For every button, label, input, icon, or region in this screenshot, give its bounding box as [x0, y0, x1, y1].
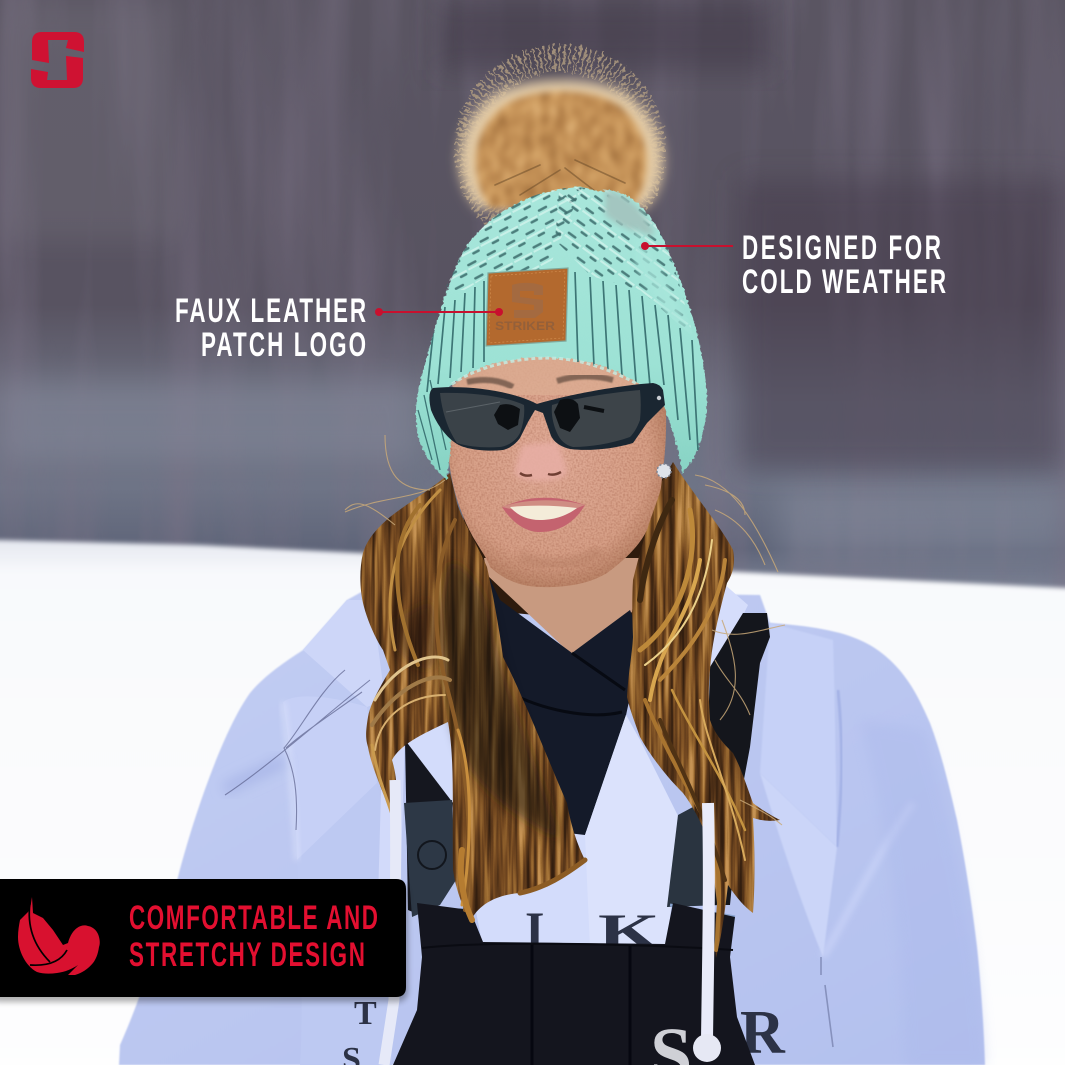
- shadowed hair behind the neck: [455, 470, 668, 625]
- mouth: [502, 498, 585, 532]
- callout text: [742, 229, 946, 301]
- jacket: [119, 590, 985, 1065]
- icon: feather: [18, 897, 100, 975]
- cuff lower edge stitching: [452, 358, 660, 397]
- faux leather patch: STRIKER: [495, 319, 555, 333]
- fur core: [476, 91, 647, 208]
- white hood V-neck: [342, 583, 786, 1065]
- callout text: PATCH LOGO: [201, 326, 366, 364]
- nose: [515, 442, 567, 481]
- black bib overalls: [393, 903, 755, 1065]
- flyaway hairs: [345, 435, 785, 825]
- faux leather patch: [486, 268, 568, 346]
- banner text: COMFORTABLE AND: [129, 899, 378, 937]
- feature banner: [0, 879, 408, 1002]
- left lapel: [303, 600, 385, 707]
- fur spikes: [468, 58, 652, 242]
- hair: [360, 462, 780, 958]
- banner text: [129, 899, 378, 974]
- woman: photographic figure: [119, 58, 985, 1065]
- callout text: COLD WEATHER: [742, 263, 946, 301]
- callout text: DESIGNED FOR: [742, 229, 941, 267]
- face: [447, 347, 666, 587]
- photo background: snowfield: [0, 539, 1065, 1065]
- jacket letters: I: [525, 901, 544, 957]
- leader line with dots: [641, 242, 733, 250]
- white hood V-neck: K: [598, 903, 660, 959]
- white hood V-neck: R: [740, 999, 786, 1065]
- callout: faux leather patch logo: [175, 292, 503, 364]
- callout: designed for cold weather: [641, 229, 946, 301]
- photo background: blurred winter tree line: [0, 0, 1065, 610]
- cable knit texture: [446, 187, 691, 328]
- brand logo: red S: [31, 32, 84, 88]
- neck: [484, 558, 640, 655]
- dark turtleneck: [460, 560, 642, 850]
- beanie body: [416, 187, 707, 480]
- banner panel: [0, 879, 406, 997]
- ribbed cuff lines: [418, 272, 698, 470]
- callout text: FAUX LEATHER: [175, 292, 366, 330]
- beanie: [416, 180, 707, 480]
- earring: [657, 464, 671, 478]
- drawstrings: [384, 780, 721, 1065]
- forehead: [452, 355, 660, 395]
- leader line with dots: [375, 308, 503, 316]
- sunglasses: [429, 383, 665, 451]
- callout text: [175, 292, 366, 364]
- white hood V-neck: T: [354, 995, 377, 1032]
- overall straps with buckles: [404, 613, 770, 917]
- stray hair over left arm: [225, 670, 370, 830]
- banner text: STRETCHY DESIGN: [129, 936, 365, 974]
- right lapel and sleeve folds: [760, 623, 837, 847]
- pom-pom: [459, 58, 663, 242]
- fluffy halo: [459, 80, 663, 208]
